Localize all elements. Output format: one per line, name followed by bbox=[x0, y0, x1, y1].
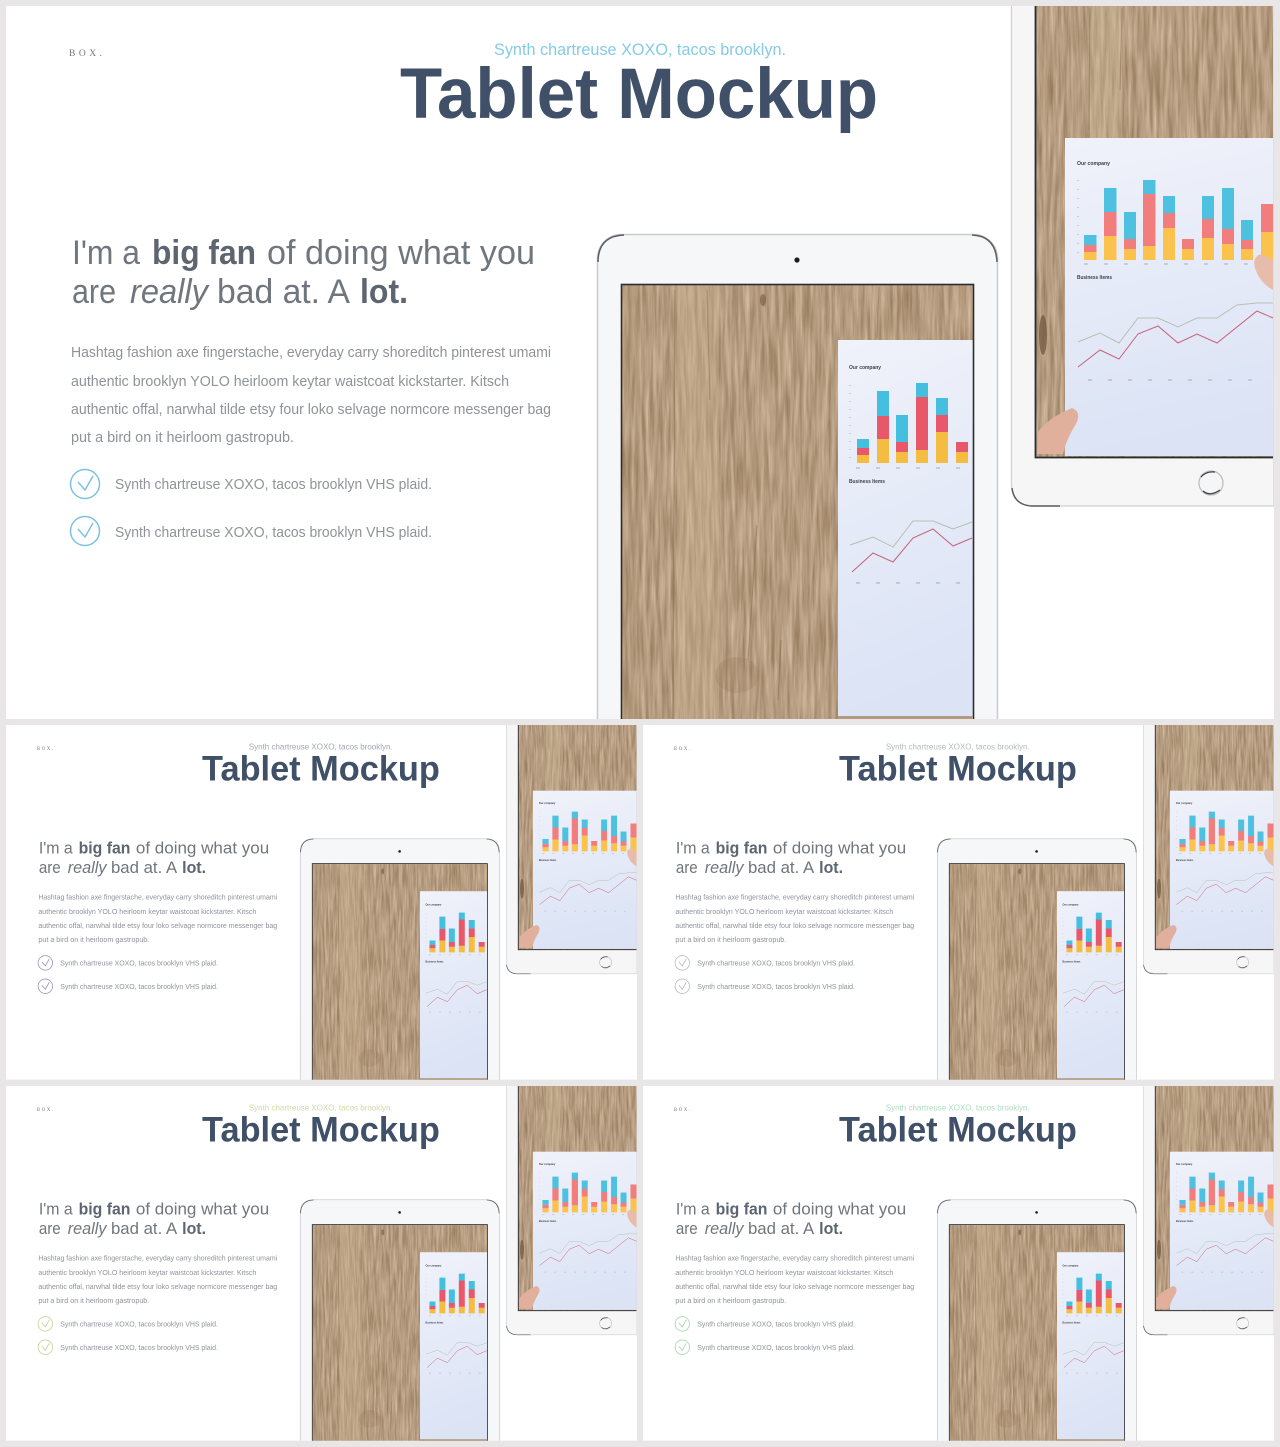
heading: big fan bbox=[79, 1199, 130, 1218]
title: Tablet Mockup bbox=[839, 750, 1077, 789]
body text bbox=[38, 1254, 278, 1305]
heading: really bbox=[705, 858, 745, 877]
tablet: cropped upper right: Business Items bbox=[1077, 275, 1112, 281]
checklist item 2 bbox=[38, 979, 218, 993]
heading: really bbox=[705, 1219, 745, 1238]
body text: authentic brooklyn YOLO heirloom keytar waistcoat kickstarter. Kitsch bbox=[38, 907, 256, 916]
heading: are bbox=[72, 273, 116, 311]
heading: really bbox=[130, 273, 210, 311]
body text: put a bird on it heirloom gastropub. bbox=[38, 1296, 149, 1305]
checklist item 2 bbox=[675, 979, 855, 993]
heading: of doing what you bbox=[136, 1199, 269, 1218]
logo: BOX. bbox=[69, 49, 102, 59]
logo: BOX. bbox=[37, 747, 53, 752]
tablet: cropped upper right: Business Items bbox=[1176, 859, 1194, 862]
checklist item 2: Synth chartreuse XOXO, tacos brooklyn VHS plaid. bbox=[60, 982, 218, 991]
body text: authentic offal, narwhal tilde etsy four loko selvage normcore messenger bag bbox=[71, 402, 551, 418]
heading: of doing what you bbox=[267, 234, 535, 272]
tablet: portrait front bbox=[300, 1200, 499, 1447]
title: Tablet Mockup bbox=[202, 1111, 440, 1150]
heading: big fan bbox=[716, 1199, 767, 1218]
checklist item 1 bbox=[38, 956, 218, 970]
heading: of doing what you bbox=[136, 838, 269, 857]
body text: Hashtag fashion axe fingerstache, everyday carry shoreditch pinterest umami bbox=[71, 345, 551, 361]
tablet: cropped upper right: Our company bbox=[1176, 802, 1193, 805]
tablet: portrait front: Business Items bbox=[1062, 960, 1081, 963]
panel: slide variant gray bbox=[643, 722, 1274, 1097]
body text: authentic offal, narwhal tilde etsy four loko selvage normcore messenger bag bbox=[675, 1282, 914, 1291]
logo: BOX. bbox=[37, 1108, 53, 1113]
heading: I'm a bbox=[72, 234, 140, 272]
checklist item 2: Synth chartreuse XOXO, tacos brooklyn VHS plaid. bbox=[115, 525, 432, 541]
tablet: cropped upper right: Our company bbox=[1077, 161, 1110, 167]
tablet: portrait front: Our company bbox=[1062, 904, 1079, 907]
heading: bad at. A bbox=[748, 858, 815, 877]
checklist item 1 bbox=[70, 470, 432, 498]
subtitle: Synth chartreuse XOXO, tacos brooklyn. bbox=[494, 40, 786, 59]
checklist item 1 bbox=[675, 1317, 855, 1331]
checklist item 2: Synth chartreuse XOXO, tacos brooklyn VHS plaid. bbox=[697, 982, 855, 991]
heading: big fan bbox=[152, 234, 256, 272]
heading: lot. bbox=[819, 1219, 843, 1238]
body text bbox=[675, 1254, 915, 1305]
panel: slide variant purple bbox=[6, 722, 637, 1097]
heading: are bbox=[676, 1219, 698, 1238]
body text: put a bird on it heirloom gastropub. bbox=[675, 935, 786, 944]
heading: bad at. A bbox=[748, 1219, 815, 1238]
panel: slide variant yellow-green bbox=[6, 1083, 637, 1447]
tablet: portrait front bbox=[300, 839, 499, 1097]
heading: lot. bbox=[182, 858, 206, 877]
heading: are bbox=[676, 858, 698, 877]
title: Tablet Mockup bbox=[400, 55, 878, 134]
body text: authentic brooklyn YOLO heirloom keytar waistcoat kickstarter. Kitsch bbox=[675, 907, 893, 916]
heading: I'm a bbox=[676, 1199, 710, 1218]
tablet: portrait front: Our company bbox=[849, 365, 881, 371]
tablet: cropped upper right bbox=[506, 722, 637, 974]
body text: authentic brooklyn YOLO heirloom keytar waistcoat kickstarter. Kitsch bbox=[675, 1268, 893, 1277]
tablet: portrait front bbox=[937, 1200, 1136, 1447]
checklist item 2 bbox=[70, 516, 432, 546]
heading: bad at. A bbox=[111, 858, 178, 877]
heading: big fan bbox=[79, 838, 130, 857]
tablet: portrait front: Our company bbox=[1062, 1265, 1079, 1268]
tablet: cropped upper right: Our company bbox=[539, 802, 556, 805]
logo: BOX. bbox=[674, 747, 690, 752]
body text: put a bird on it heirloom gastropub. bbox=[675, 1296, 786, 1305]
tablet: portrait front: Business Items bbox=[425, 960, 444, 963]
heading: are bbox=[39, 1219, 61, 1238]
body text: authentic offal, narwhal tilde etsy four loko selvage normcore messenger bag bbox=[38, 921, 277, 930]
heading: I'm a bbox=[39, 838, 73, 857]
body text: authentic brooklyn YOLO heirloom keytar waistcoat kickstarter. Kitsch bbox=[38, 1268, 256, 1277]
tablet: cropped upper right bbox=[1012, 0, 1274, 506]
panel: main slide bbox=[6, 0, 1274, 754]
tablet: cropped upper right bbox=[506, 1083, 637, 1335]
checklist item 1: Synth chartreuse XOXO, tacos brooklyn VHS plaid. bbox=[697, 958, 855, 967]
heading: of doing what you bbox=[773, 838, 906, 857]
heading: lot. bbox=[819, 858, 843, 877]
heading: really bbox=[68, 1219, 108, 1238]
body text: Hashtag fashion axe fingerstache, everyday carry shoreditch pinterest umami bbox=[38, 1254, 278, 1263]
checklist item 2: Synth chartreuse XOXO, tacos brooklyn VHS plaid. bbox=[60, 1343, 218, 1352]
tablet: cropped upper right bbox=[1143, 722, 1274, 974]
checklist item 1: Synth chartreuse XOXO, tacos brooklyn VHS plaid. bbox=[697, 1319, 855, 1328]
checklist item 1 bbox=[38, 1317, 218, 1331]
heading: really bbox=[68, 858, 108, 877]
body text bbox=[675, 893, 915, 944]
heading: I'm a bbox=[676, 838, 710, 857]
body text: authentic offal, narwhal tilde etsy four loko selvage normcore messenger bag bbox=[38, 1282, 277, 1291]
body text: authentic brooklyn YOLO heirloom keytar waistcoat kickstarter. Kitsch bbox=[71, 374, 509, 390]
body text: put a bird on it heirloom gastropub. bbox=[71, 430, 294, 446]
heading: are bbox=[39, 858, 61, 877]
tablet: cropped upper right: Business Items bbox=[539, 859, 557, 862]
checklist item 1 bbox=[675, 956, 855, 970]
body text: Hashtag fashion axe fingerstache, everyday carry shoreditch pinterest umami bbox=[675, 1254, 915, 1263]
tablet: cropped upper right: Business Items bbox=[539, 1220, 557, 1223]
checklist item 1: Synth chartreuse XOXO, tacos brooklyn VHS plaid. bbox=[115, 477, 432, 493]
tablet: cropped upper right: Business Items bbox=[1176, 1220, 1194, 1223]
subtitle: Synth chartreuse XOXO, tacos brooklyn. bbox=[249, 741, 393, 751]
tablet: cropped upper right: Our company bbox=[539, 1163, 556, 1166]
heading bbox=[39, 838, 269, 877]
tablet: portrait front: Business Items bbox=[849, 479, 885, 485]
body text: Hashtag fashion axe fingerstache, everyday carry shoreditch pinterest umami bbox=[675, 893, 915, 902]
tablet: portrait front: Our company bbox=[425, 904, 442, 907]
title: Tablet Mockup bbox=[839, 1111, 1077, 1150]
checklist item 1: Synth chartreuse XOXO, tacos brooklyn VHS plaid. bbox=[60, 1319, 218, 1328]
tablet: portrait front bbox=[937, 839, 1136, 1097]
checklist item 2 bbox=[38, 1340, 218, 1354]
heading bbox=[676, 838, 906, 877]
heading: lot. bbox=[360, 273, 408, 311]
body text bbox=[71, 345, 551, 446]
heading bbox=[72, 234, 535, 311]
body text bbox=[38, 893, 278, 944]
subtitle: Synth chartreuse XOXO, tacos brooklyn. bbox=[886, 741, 1030, 751]
heading bbox=[39, 1199, 269, 1238]
body text: Hashtag fashion axe fingerstache, everyday carry shoreditch pinterest umami bbox=[38, 893, 278, 902]
checklist item 2: Synth chartreuse XOXO, tacos brooklyn VHS plaid. bbox=[697, 1343, 855, 1352]
body text: authentic offal, narwhal tilde etsy four loko selvage normcore messenger bag bbox=[675, 921, 914, 930]
heading: lot. bbox=[182, 1219, 206, 1238]
tablet: cropped upper right bbox=[1143, 1083, 1274, 1335]
subtitle: Synth chartreuse XOXO, tacos brooklyn. bbox=[249, 1102, 393, 1112]
tablet: portrait front: Business Items bbox=[1062, 1321, 1081, 1324]
panel: slide variant green bbox=[643, 1083, 1274, 1447]
checklist item 2 bbox=[675, 1340, 855, 1354]
logo: BOX. bbox=[674, 1108, 690, 1113]
heading: bad at. A bbox=[217, 273, 350, 311]
heading: big fan bbox=[716, 838, 767, 857]
tablet: portrait front: Business Items bbox=[425, 1321, 444, 1324]
body text: put a bird on it heirloom gastropub. bbox=[38, 935, 149, 944]
tablet: portrait front: Our company bbox=[425, 1265, 442, 1268]
tablet: portrait front bbox=[598, 234, 998, 754]
heading bbox=[676, 1199, 906, 1238]
heading: of doing what you bbox=[773, 1199, 906, 1218]
title: Tablet Mockup bbox=[202, 750, 440, 789]
heading: I'm a bbox=[39, 1199, 73, 1218]
subtitle: Synth chartreuse XOXO, tacos brooklyn. bbox=[886, 1102, 1030, 1112]
heading: bad at. A bbox=[111, 1219, 178, 1238]
tablet: cropped upper right: Our company bbox=[1176, 1163, 1193, 1166]
checklist item 1: Synth chartreuse XOXO, tacos brooklyn VHS plaid. bbox=[60, 958, 218, 967]
